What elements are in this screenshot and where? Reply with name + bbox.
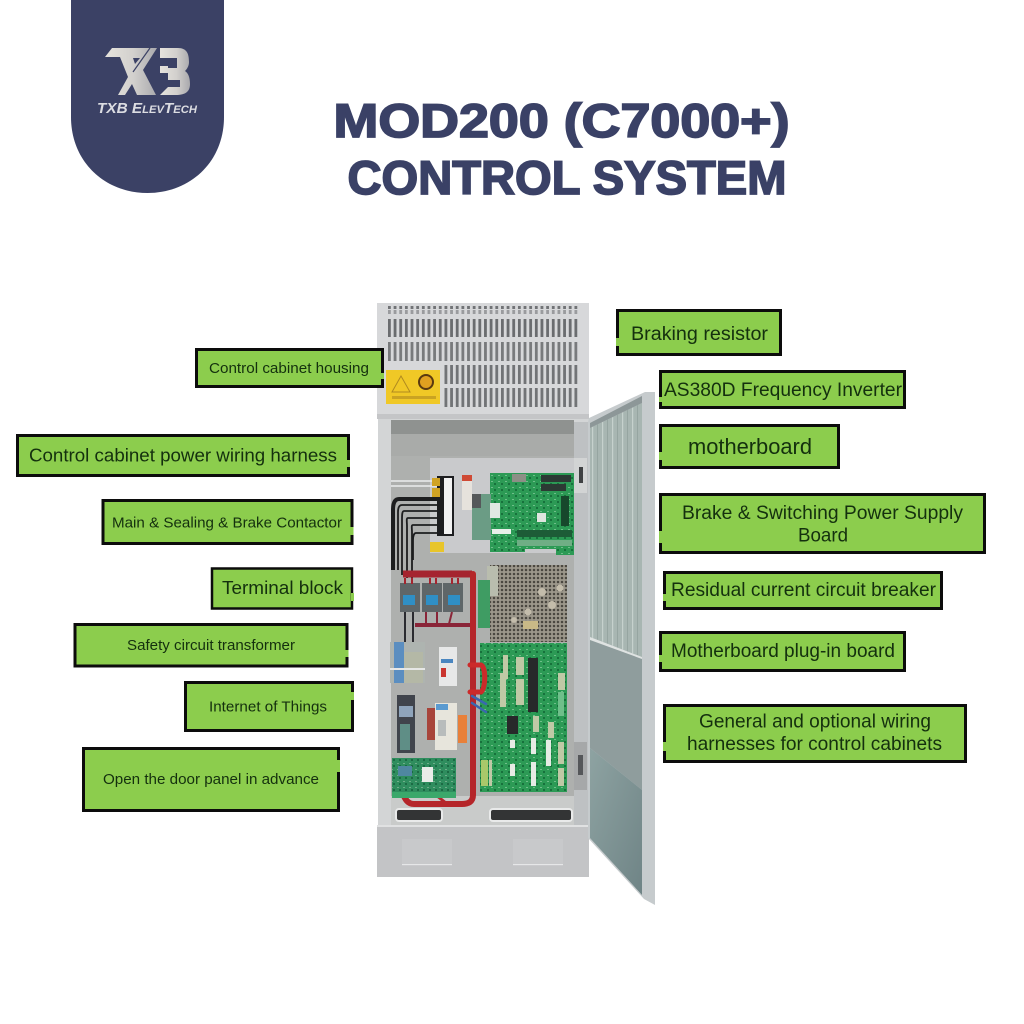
label: Control cabinet power wiring harness: Control cabinet power wiring harness xyxy=(29,444,337,466)
residual current breaker xyxy=(439,647,457,686)
label: Internet of Things: Internet of Things xyxy=(209,698,327,716)
plug-in board xyxy=(480,643,567,792)
safety transformer xyxy=(427,703,467,750)
label: Control cabinet power wiring harness xyxy=(18,436,350,476)
floor vents xyxy=(396,809,572,821)
red wiring harness xyxy=(402,574,486,804)
label: Open the door panel in advance: Open the door panel in advance xyxy=(103,771,319,788)
label: Braking resistor: Braking resistor xyxy=(631,323,768,345)
label: AS380D Frequency Inverter xyxy=(659,372,904,408)
label: motherboard xyxy=(659,426,838,468)
label: Motherboard plug-in board xyxy=(659,632,904,670)
label: Brake and Switching Power Supply Board: Brake & Switching Power Supply xyxy=(682,503,963,524)
label: Main and Sealing and Brake Contactor: Main & Sealing & Brake Contactor xyxy=(112,514,342,532)
power wires xyxy=(393,499,437,578)
cabinet top panel with vents xyxy=(377,303,589,419)
label: Safety circuit transformer xyxy=(75,624,348,666)
terminal strip xyxy=(432,476,454,536)
label: Control cabinet housing xyxy=(196,350,384,386)
label: Safety circuit transformer: Safety circuit transformer xyxy=(127,637,295,654)
label: AS380D Frequency Inverter: AS380D Frequency Inverter xyxy=(664,380,903,401)
label: Terminal block xyxy=(212,568,354,608)
motherboard mounting plate xyxy=(430,458,574,553)
IoT module xyxy=(397,695,415,753)
label: Braking resistor xyxy=(616,310,780,354)
cabinet base xyxy=(377,825,589,877)
logo badge xyxy=(71,0,224,193)
label: General and optional wiring harnesses xyxy=(663,706,966,762)
open door xyxy=(588,392,655,905)
title xyxy=(334,94,790,204)
label: Residual current circuit breaker: Residual current circuit breaker xyxy=(671,580,937,601)
label: Internet of Things xyxy=(186,682,354,730)
contactors xyxy=(400,574,474,642)
label: Brake and Switching Power Supply Board xyxy=(659,494,984,552)
door opening board xyxy=(392,758,456,798)
title line 2: CONTROL SYSTEM xyxy=(348,151,786,204)
label: General and optional wiring harnesses: harnesses for control cabinets xyxy=(687,734,942,755)
title line 1: MOD200 (C7000+) xyxy=(334,94,790,147)
cabinet body xyxy=(378,419,590,827)
switching power supply xyxy=(478,565,567,642)
label: Residual current circuit breaker xyxy=(663,572,942,608)
terminal blocks xyxy=(390,642,425,683)
label: Motherboard plug-in board: Motherboard plug-in board xyxy=(671,641,895,662)
label: Brake and Switching Power Supply Board: Board xyxy=(798,526,848,546)
icon: TXB logo mark xyxy=(105,48,190,95)
label: Terminal block: Terminal block xyxy=(222,577,344,598)
warning sign xyxy=(386,370,440,404)
white signal wires xyxy=(391,481,437,486)
motherboard xyxy=(472,473,574,555)
control cabinet illustration xyxy=(377,303,655,905)
label: General and optional wiring harnesses: General and optional wiring xyxy=(699,712,931,732)
label: Open the door panel in advance xyxy=(84,748,340,810)
label: motherboard: motherboard xyxy=(688,434,812,459)
label: Main and Sealing and Brake Contactor xyxy=(103,500,354,544)
logo wordmark: TXB ElevTech xyxy=(97,100,198,117)
label: Control cabinet housing: Control cabinet housing xyxy=(209,360,369,377)
